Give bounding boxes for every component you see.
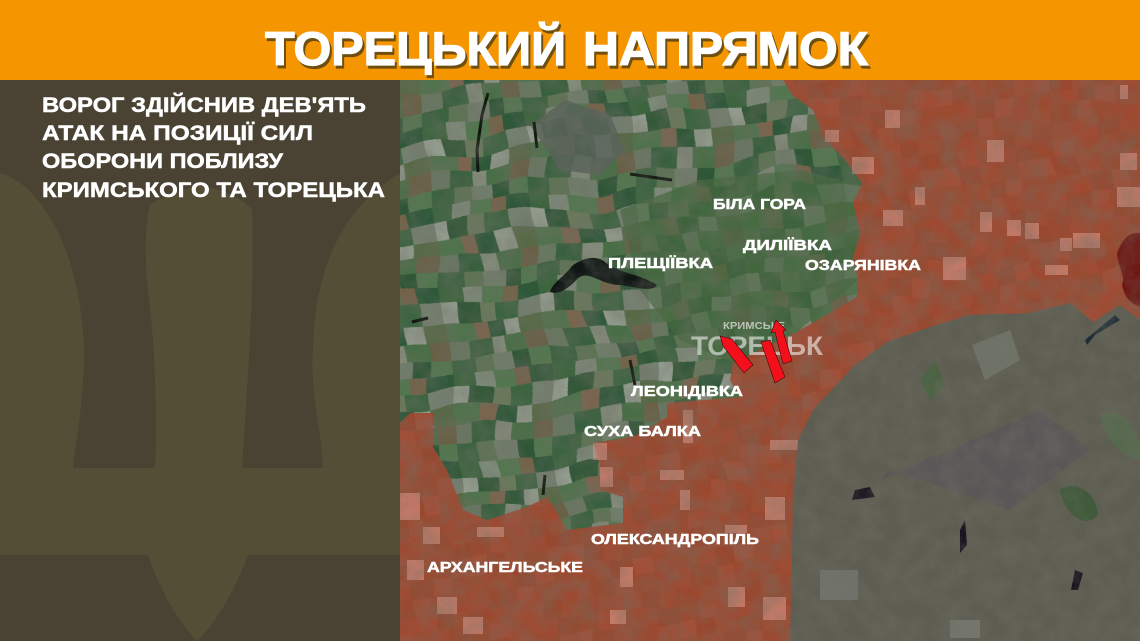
fields: patches in south-east area bbox=[820, 315, 1140, 638]
arrow: north attack bbox=[771, 320, 792, 364]
texture bbox=[400, 80, 1140, 641]
arrow: west attack bbox=[720, 336, 753, 373]
label: Диліївка: ДИЛІЇВКА bbox=[743, 237, 832, 254]
title: ТОРЕЦЬКИЙ bbox=[265, 22, 566, 75]
zone: occupied territory bbox=[400, 80, 1140, 641]
label: Архангельське: АРХАНГЕЛЬСЬКЕ bbox=[427, 559, 583, 576]
town: urban area north bbox=[530, 100, 625, 175]
text block: attack summary: ОБОРОНИ ПОБЛИЗУ bbox=[42, 149, 284, 173]
text block: attack summary: КРИМСЬКОГО ТА ТОРЕЦЬКА bbox=[42, 178, 385, 202]
label: Торецьк: ТОРЕЦЬК bbox=[691, 331, 824, 361]
fields: pale patches in occupied territory bbox=[400, 85, 1140, 634]
settlement labels bbox=[427, 196, 921, 576]
panel: left background with trident emblem bbox=[0, 80, 400, 641]
lake: eastern reservoir bbox=[1117, 233, 1140, 307]
arrow: centre attack bbox=[761, 340, 785, 383]
label: Суха Балка: СУХА БАЛКА bbox=[584, 423, 701, 440]
title: НАПРЯМОК bbox=[585, 25, 870, 78]
header bar bbox=[0, 0, 1140, 80]
zone: occupied urban area south-east bbox=[790, 303, 1140, 641]
ravines bbox=[412, 93, 672, 495]
lake: reservoir bbox=[550, 258, 657, 293]
map: satellite view with control zones bbox=[370, 50, 1140, 641]
label: Кримське: КРИМСЬКЕ bbox=[723, 320, 785, 332]
text block: attack summary: АТАК НА ПОЗИЦІЇ СИЛ bbox=[42, 121, 313, 145]
icon: trident emblem watermark bbox=[0, 173, 400, 641]
title bbox=[265, 22, 870, 78]
text block: attack summary: ВОРОГ ЗДІЙСНИВ ДЕВ'ЯТЬ bbox=[42, 92, 366, 117]
zone: darker green belt east of centre bbox=[620, 170, 862, 363]
arrows: attack directions bbox=[720, 320, 792, 383]
darkening wash over farmland bbox=[400, 80, 862, 530]
label: Олександропіль: ОЛЕКСАНДРОПІЛЬ bbox=[591, 531, 759, 548]
label: Біла Гора: БІЛА ГОРА bbox=[713, 196, 806, 213]
label: Леонідівка: ЛЕОНІДІВКА bbox=[631, 383, 743, 400]
label: Плещіївка: ПЛЕЩІЇВКА bbox=[608, 255, 713, 272]
base farmland fields bbox=[370, 50, 1140, 641]
title: НАПРЯМОК bbox=[583, 22, 868, 75]
label: Озарянівка: ОЗАРЯНІВКА bbox=[805, 257, 921, 274]
text block: attack summary bbox=[42, 92, 385, 202]
title: ТОРЕЦЬКИЙ bbox=[267, 25, 568, 78]
